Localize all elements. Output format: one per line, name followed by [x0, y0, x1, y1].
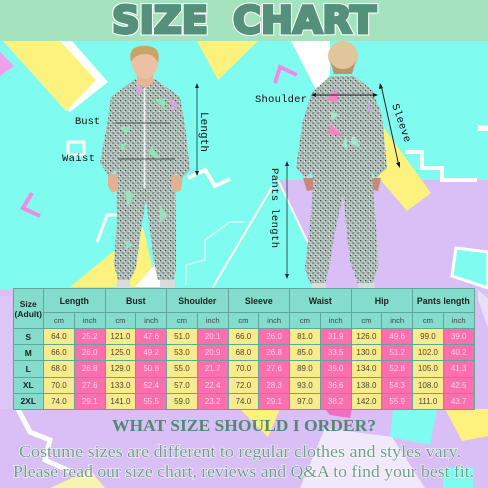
- size table: 68.0: [236, 348, 251, 357]
- size table: 142.0: [356, 397, 376, 406]
- measure: length: [195, 83, 209, 176]
- size table: cm: [361, 316, 371, 325]
- size table: Waist: [309, 296, 332, 306]
- size table: 26.8: [266, 348, 282, 357]
- size table: 55.9: [389, 397, 405, 406]
- size table: inch: [390, 316, 404, 325]
- size table: inch: [329, 316, 343, 325]
- figure: back view model: [296, 41, 387, 288]
- size table: 26.8: [82, 364, 97, 373]
- size table: 49.6: [389, 332, 405, 341]
- size table: 105.0: [418, 364, 438, 373]
- size table: 2XL: [20, 396, 36, 406]
- size table: 25.2: [82, 332, 97, 341]
- zipper: [144, 88, 146, 188]
- size table: inch: [144, 316, 158, 325]
- size table: 47.6: [143, 332, 159, 341]
- size table: S: [25, 332, 31, 342]
- size table: 68.0: [51, 364, 67, 373]
- size table: 23.2: [205, 397, 220, 406]
- size table: 40.2: [451, 348, 466, 357]
- size table: 81.0: [297, 332, 313, 341]
- title: SIZE: [112, 0, 208, 42]
- size table: M: [25, 348, 32, 358]
- hands back: [303, 178, 381, 191]
- size table: Pants length: [417, 296, 470, 306]
- size table: Bust: [126, 296, 146, 306]
- size table: 42.5: [451, 381, 466, 390]
- size table: 74.0: [51, 397, 67, 406]
- size table: cm: [54, 316, 64, 325]
- measure: pants length: Pants length: [268, 168, 280, 248]
- size table: 35.0: [328, 364, 343, 373]
- measure: shoulder: [255, 93, 378, 106]
- size table: XL: [23, 380, 34, 390]
- measure: sleeve: Sleeve: [388, 102, 413, 144]
- title: CHART: [233, 0, 377, 42]
- size table: 52.4: [143, 381, 159, 390]
- measure: bust: [75, 116, 170, 128]
- size table: 85.0: [297, 348, 313, 357]
- advice text: [13, 442, 474, 481]
- question heading: WHAT SIZE SHOULD I ORDER?: [112, 416, 376, 435]
- size table: 93.0: [297, 381, 313, 390]
- size table: 51.2: [389, 348, 405, 357]
- measure: waist: [62, 153, 175, 165]
- size table: 38.2: [328, 397, 343, 406]
- size table: cm: [177, 316, 187, 325]
- size table: 134.0: [356, 364, 376, 373]
- size table: 138.0: [356, 381, 376, 390]
- size table: 125.0: [110, 348, 130, 357]
- size table: 26.0: [82, 348, 97, 357]
- advice text: Please read our size chart, reviews and Q&A to find your best fit.: [13, 462, 474, 481]
- size table: cm: [115, 316, 125, 325]
- size table: 55.5: [143, 397, 159, 406]
- size table: 97.0: [297, 397, 313, 406]
- size table: Size: [20, 298, 37, 308]
- size table: 28.3: [266, 381, 282, 390]
- measure: pants length: [268, 161, 289, 279]
- measure: sleeve: [379, 83, 413, 168]
- size table: [13, 288, 475, 410]
- size table: 31.9: [328, 332, 343, 341]
- size table: 50.8: [143, 364, 159, 373]
- size table: 29.1: [266, 397, 282, 406]
- size table: 129.0: [110, 364, 130, 373]
- size table: inch: [206, 316, 220, 325]
- size table: Sleeve: [245, 296, 273, 306]
- size table: inch: [267, 316, 281, 325]
- size table: 43.7: [451, 397, 466, 406]
- jacket back: [296, 76, 387, 186]
- size table: 41.3: [451, 364, 466, 373]
- size table: 66.0: [236, 332, 251, 341]
- hair back: [328, 41, 358, 71]
- size table: 70.0: [236, 364, 251, 373]
- title: [112, 0, 377, 42]
- jacket front: [100, 79, 190, 178]
- size table: 64.0: [51, 332, 67, 341]
- size table: cm: [423, 316, 433, 325]
- size table: 27.6: [266, 364, 282, 373]
- pants back: [305, 175, 378, 284]
- size table: (Adult): [15, 308, 42, 318]
- size table: 22.4: [205, 381, 220, 390]
- size table: 59.0: [174, 397, 190, 406]
- measure: bust: Bust: [75, 116, 100, 128]
- size table: 27.6: [82, 381, 97, 390]
- advice text: Costume sizes are different to regular clothes and styles vary.: [19, 442, 461, 461]
- size table: 108.0: [418, 381, 438, 390]
- jacket print: [120, 98, 165, 160]
- shoes front: [116, 280, 175, 288]
- size table: 130.0: [356, 348, 376, 357]
- size table: 133.0: [110, 381, 130, 390]
- size table: inch: [452, 316, 466, 325]
- size table: 89.0: [297, 364, 313, 373]
- jacket print back: [326, 88, 344, 136]
- size table: 20.9: [205, 348, 220, 357]
- neck and head front: [137, 70, 153, 88]
- size table: 126.0: [356, 332, 376, 341]
- measure: shoulder: Shoulder: [255, 94, 307, 106]
- size table: 111.0: [419, 397, 437, 406]
- size table: Length: [60, 296, 89, 306]
- size table: 26.0: [266, 332, 282, 341]
- size table: 121.0: [110, 332, 130, 341]
- figure: front view model: [100, 45, 190, 288]
- title: CHART: [233, 0, 377, 42]
- size table: 39.0: [451, 332, 466, 341]
- size table: 49.2: [143, 348, 159, 357]
- title band: [0, 0, 488, 41]
- size table: 99.0: [420, 332, 436, 341]
- size table: 53.0: [174, 348, 190, 357]
- measure: waist: Waist: [62, 153, 95, 165]
- pants front: [114, 172, 176, 280]
- size table: 57.0: [174, 381, 190, 390]
- size table: 74.0: [236, 397, 251, 406]
- size table: 21.7: [205, 364, 220, 373]
- size table: 102.0: [418, 348, 438, 357]
- size table: Shoulder: [178, 296, 216, 306]
- shoes back: [312, 283, 375, 288]
- size table: cm: [300, 316, 310, 325]
- size table: 52.8: [389, 364, 405, 373]
- size table: 55.0: [174, 364, 190, 373]
- size table: 20.1: [205, 332, 220, 341]
- size table: 72.0: [236, 381, 251, 390]
- size table: 54.3: [389, 381, 405, 390]
- size table: 33.5: [328, 348, 343, 357]
- size table: 141.0: [110, 397, 130, 406]
- measure: length: Length: [197, 112, 209, 152]
- size table: Hip: [375, 296, 389, 306]
- size table: 66.0: [51, 348, 67, 357]
- size table: 36.6: [328, 381, 343, 390]
- hands front: [108, 174, 183, 193]
- size table: 51.0: [174, 332, 190, 341]
- size table: 29.1: [82, 397, 97, 406]
- title: SIZE: [112, 0, 208, 42]
- size table: 70.0: [51, 381, 67, 390]
- size table: L: [26, 364, 31, 374]
- size table: cm: [238, 316, 248, 325]
- size table: inch: [83, 316, 97, 325]
